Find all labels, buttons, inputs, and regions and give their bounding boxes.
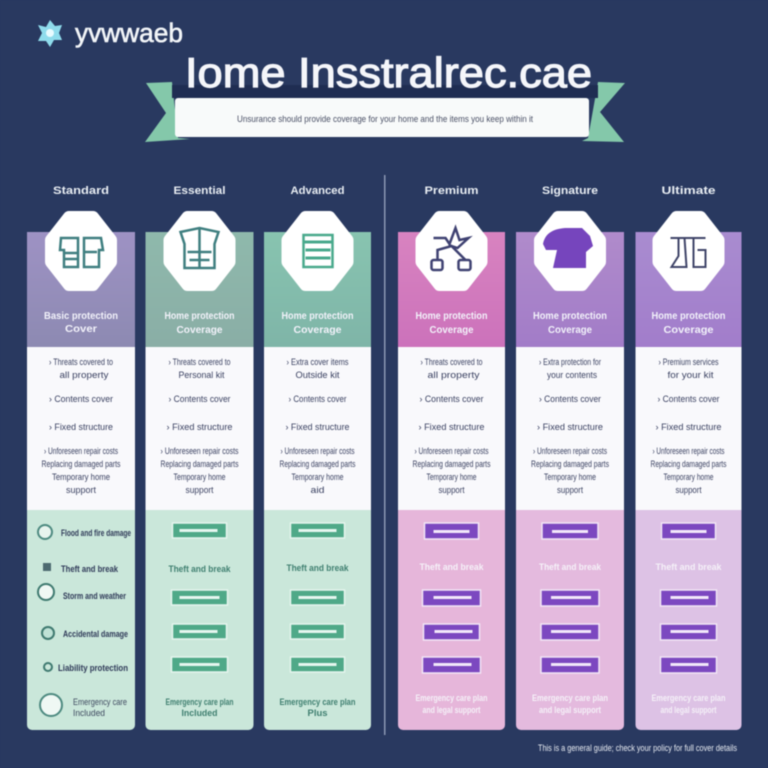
feature bars: Plus [308, 708, 328, 718]
list items: Replacing damaged parts [531, 459, 609, 469]
feature rows with icons: Liability protection [58, 663, 128, 673]
header band [398, 232, 505, 347]
list items: Replacing damaged parts [650, 459, 727, 469]
column heading: Advanced [290, 185, 344, 197]
header band [27, 232, 135, 347]
feature rows with icons: Included [73, 708, 105, 718]
band text: Home protection [652, 310, 726, 322]
list items: all property [428, 370, 480, 380]
list items: Temporary home [292, 472, 344, 482]
feature bars: and legal support [423, 705, 481, 716]
title: Iome Insstralrec.cae [185, 49, 592, 96]
feature bars: Theft and break [656, 562, 722, 573]
icon badge [658, 217, 718, 285]
list items: › Fixed structure [537, 422, 603, 432]
feature bars: Theft and break [420, 562, 484, 573]
banner ribbon [145, 82, 625, 142]
panel: column 4 [398, 185, 505, 730]
white list panel [516, 347, 624, 510]
list items: › Fixed structure [286, 422, 350, 432]
feature rows with icons: Flood and fire damage [61, 528, 131, 538]
list items: › Fixed structure [166, 422, 232, 432]
list items: Temporary home [426, 472, 476, 482]
center divider [384, 175, 386, 735]
feature bars: Theft and break [539, 562, 602, 573]
feature bars: Emergency care plan [416, 693, 488, 704]
list items: › Extra protection for [539, 357, 601, 367]
panel: column 6: Coverage [663, 324, 714, 336]
feature bars: and legal support [539, 705, 602, 716]
list items: Temporary home [664, 472, 714, 482]
list items: Replacing damaged parts [412, 459, 491, 469]
icon: network [432, 228, 470, 270]
panel: column 2 [146, 185, 254, 730]
list items: › Contents cover [289, 394, 346, 404]
feature bars: Included [182, 708, 218, 718]
feature bars: Emergency care plan [280, 697, 356, 707]
list items: Temporary home [174, 472, 226, 482]
header band [264, 232, 371, 347]
list items [280, 357, 356, 495]
icon: pillars [670, 238, 706, 267]
white list panel [146, 347, 254, 510]
panel: column 6 [636, 185, 742, 730]
feature bars: Emergency care plan [652, 693, 726, 704]
list items: aid [310, 485, 324, 495]
list items: › Threats covered to [168, 357, 230, 367]
white list panel [398, 347, 505, 510]
white list panel [636, 347, 742, 510]
list items: › Threats covered to [420, 357, 482, 367]
feature rows with icons [38, 525, 131, 718]
list items [160, 357, 239, 495]
feature bars: and legal support [660, 705, 717, 716]
subtitle: Unsurance should provide coverage for your home and the items you keep within it [237, 114, 533, 125]
icon badge [422, 217, 482, 285]
icon: package [60, 238, 103, 267]
logo [38, 18, 183, 48]
header band [636, 232, 742, 347]
feature bars: Theft and break [168, 564, 231, 574]
feature bars [652, 523, 726, 716]
list items: › Unforeseen repair costs [160, 446, 239, 456]
list items: support [676, 485, 702, 495]
list items [531, 357, 609, 495]
list items: support [66, 485, 96, 495]
list items [650, 357, 727, 495]
list items: › Premium services [658, 357, 719, 367]
panel: column 2: Coverage [176, 324, 223, 336]
feature panel [516, 510, 624, 730]
list items: › Fixed structure [418, 422, 484, 432]
list items: › Extra cover items [286, 357, 349, 367]
logo wordmark: yvwwaeb [75, 18, 183, 48]
panel: column 3 [264, 185, 371, 730]
icon: building [180, 228, 218, 268]
icon: solid shield [543, 228, 593, 268]
ribbon shadow [172, 85, 598, 98]
list items: › Contents cover [420, 394, 484, 404]
list items: › Unforeseen repair costs [414, 446, 489, 456]
feature panel [398, 510, 505, 730]
feature bars [280, 523, 356, 718]
list items: › Threats covered to [49, 357, 113, 367]
ribbon right tail [582, 82, 625, 142]
list items: your contents [547, 370, 597, 380]
list items: › Contents cover [168, 394, 230, 404]
band text: Home protection [533, 310, 607, 322]
list items: Replacing damaged parts [160, 459, 239, 469]
icon badge [51, 217, 111, 285]
header band [146, 232, 254, 347]
list items: Replacing damaged parts [280, 459, 356, 469]
icon badge [540, 217, 600, 285]
feature rows with icons: Storm and weather [63, 591, 126, 601]
list items: › Contents cover [49, 394, 113, 404]
feature panel [27, 510, 135, 730]
list items: for your kit [668, 370, 714, 380]
band text: Home protection [282, 310, 354, 322]
list items: › Unforeseen repair costs [652, 446, 725, 456]
white list panel [27, 347, 135, 510]
feature panel [264, 510, 371, 730]
list items: › Unforeseen repair costs [44, 446, 118, 456]
icon badge [288, 217, 348, 285]
band text: Basic protection [44, 310, 118, 322]
list items: all property [60, 370, 109, 380]
white list panel [264, 347, 371, 510]
panel: column 4: Coverage [430, 324, 474, 336]
list items: support [438, 485, 465, 495]
feature panel [146, 510, 254, 730]
list items: support [186, 485, 214, 495]
ribbon left tail [145, 82, 190, 142]
list items: › Contents cover [539, 394, 601, 404]
feature rows with icons: Accidental damage [63, 629, 128, 639]
list items: Outside kit [296, 370, 340, 380]
list items: support [557, 485, 583, 495]
feature bars [166, 523, 234, 718]
list items: › Fixed structure [49, 422, 113, 432]
list items: Personal kit [178, 370, 225, 380]
list items [42, 357, 121, 495]
list items: › Unforeseen repair costs [533, 446, 607, 456]
icon: document [304, 235, 332, 267]
feature panel [636, 510, 742, 730]
icon: logo mark [38, 20, 62, 47]
column heading: Standard [53, 185, 109, 197]
feature bars: Theft and break [286, 563, 349, 573]
header band [516, 232, 624, 347]
column heading: Signature [542, 185, 598, 197]
panel: column 5 [516, 185, 624, 730]
list items: › Unforeseen repair costs [280, 446, 355, 456]
column heading: Premium [424, 185, 479, 197]
icon badge [170, 217, 230, 285]
feature bars [532, 523, 608, 716]
list items: › Fixed structure [656, 422, 722, 432]
list items: Replacing damaged parts [42, 459, 121, 469]
column heading: Essential [174, 185, 226, 197]
feature bars: Emergency care plan [532, 693, 608, 704]
list items: Temporary home [52, 472, 110, 482]
list items [412, 357, 491, 495]
band text: Home protection [164, 310, 234, 322]
list items: Temporary home [544, 472, 596, 482]
feature bars [416, 523, 488, 716]
feature rows with icons: Theft and break [61, 564, 119, 574]
panel: column 3: Coverage [294, 324, 342, 336]
panel: column 1 [27, 185, 135, 730]
panel: column 1: Cover [65, 323, 97, 335]
feature bars: Emergency care plan [166, 697, 234, 707]
column heading: Ultimate [662, 185, 716, 197]
feature rows with icons: Emergency care [73, 697, 127, 707]
band text: Home protection [416, 310, 488, 322]
list items: › Contents cover [658, 394, 720, 404]
panel: column 5: Coverage [548, 324, 592, 336]
ribbon panel [175, 98, 589, 137]
